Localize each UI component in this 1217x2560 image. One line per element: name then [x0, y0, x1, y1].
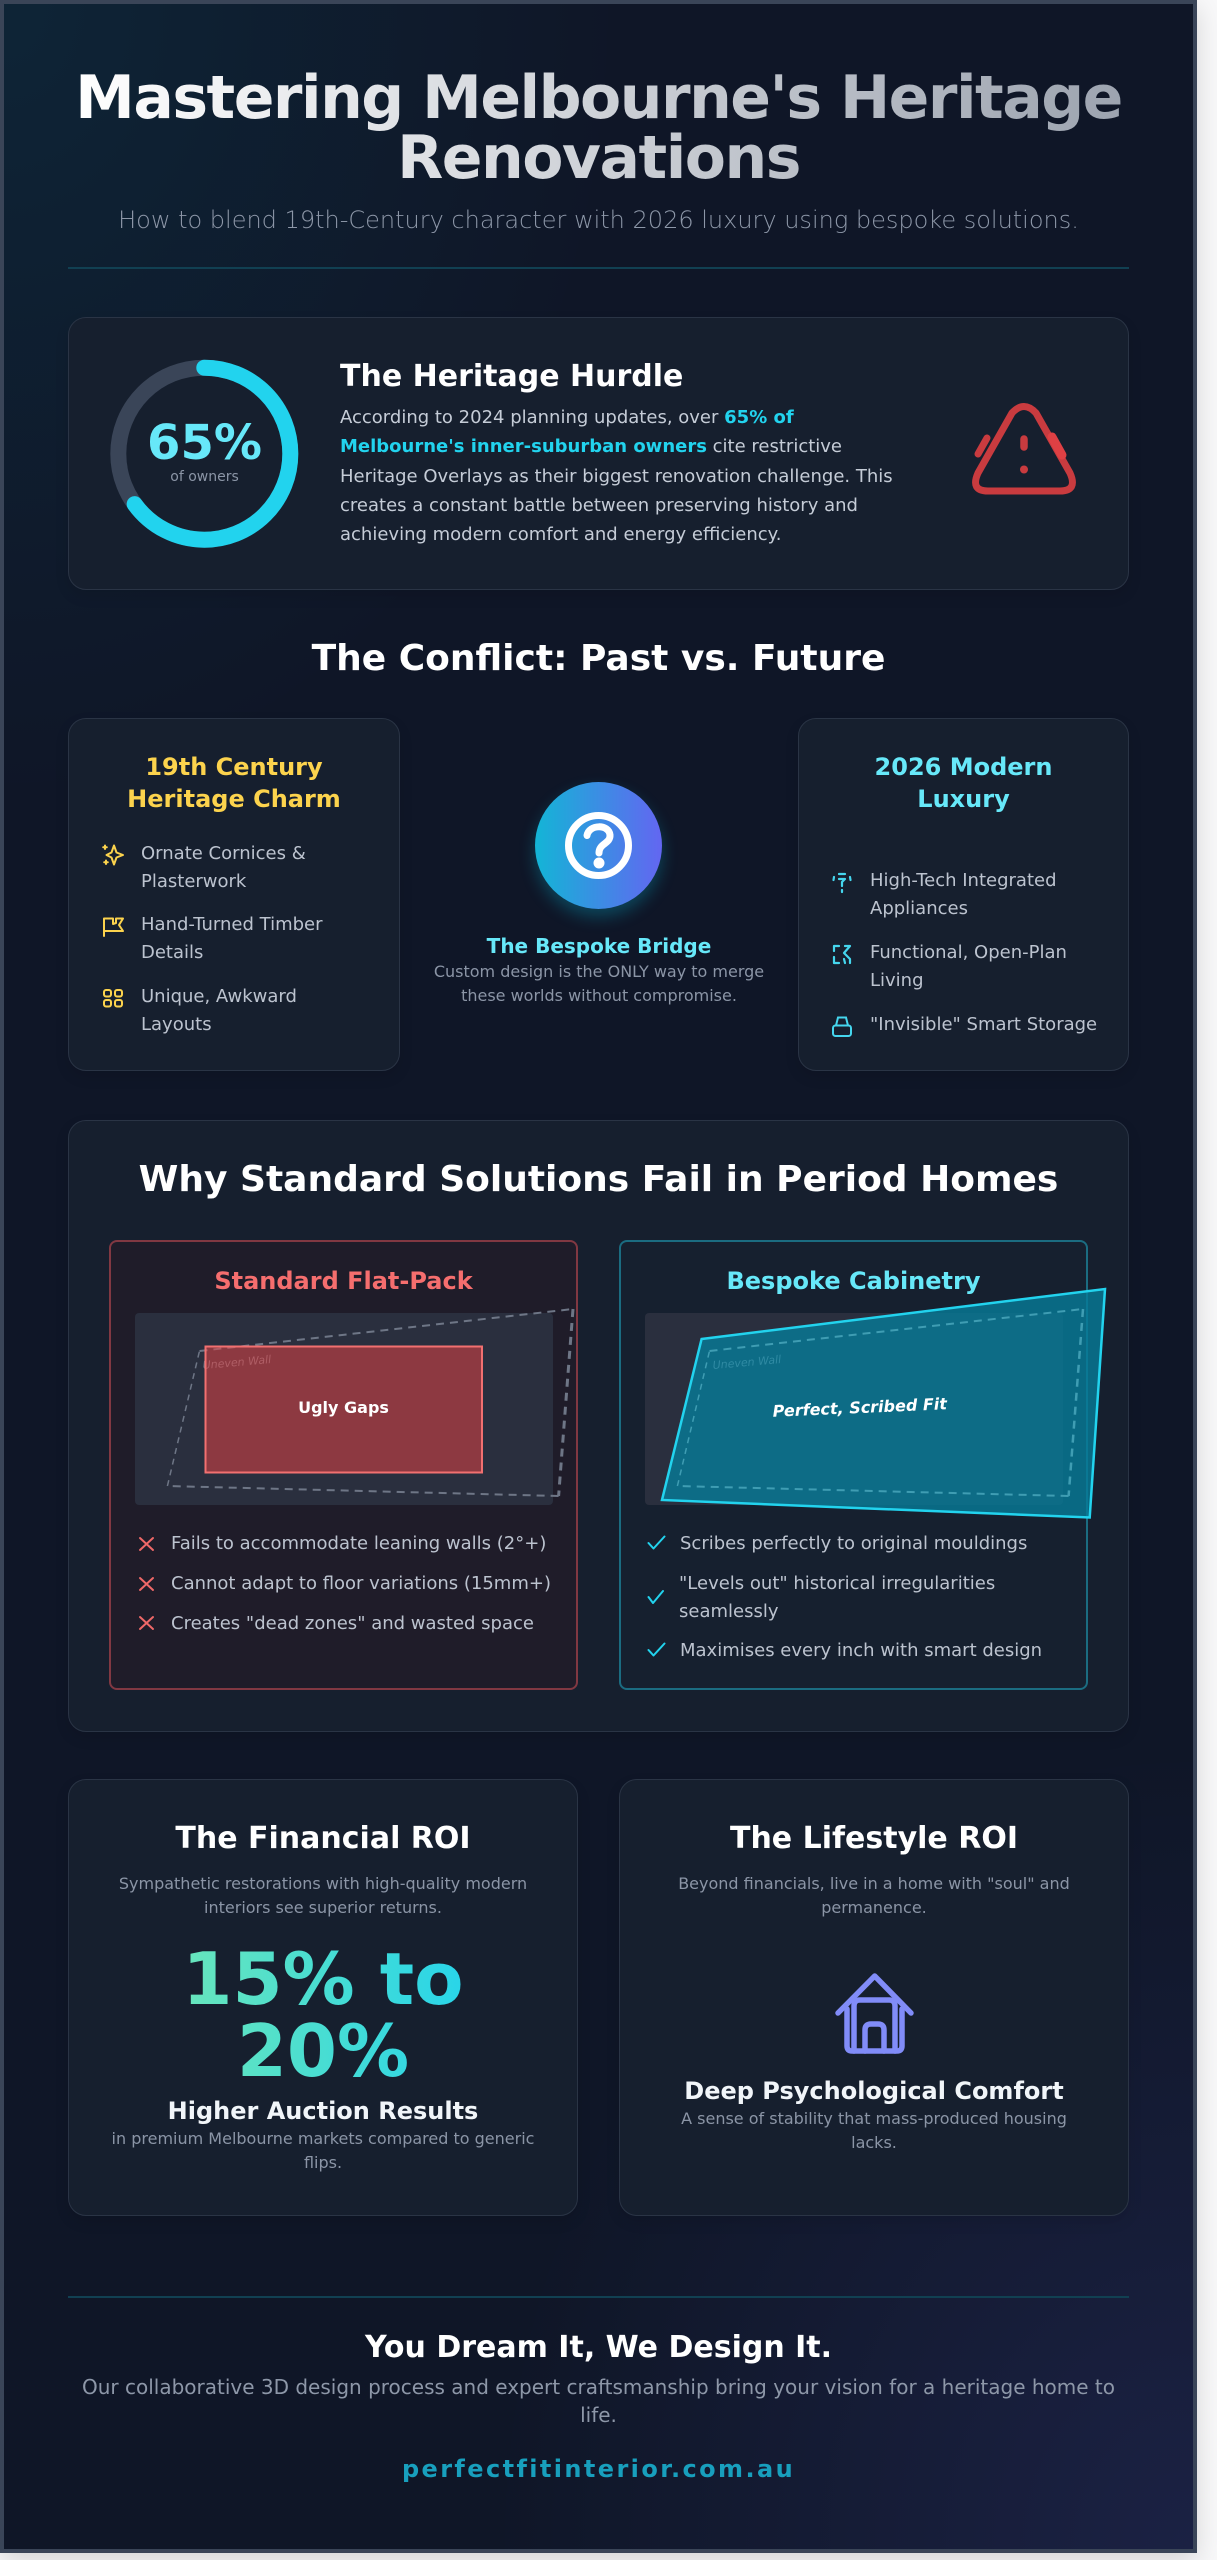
- text: ornate cornices: Ornate Cornices &: [141, 842, 306, 864]
- heading: flat-pack: Standard Flat-Pack: [214, 1267, 473, 1295]
- heading: modern: 2026 Modern: [875, 753, 1052, 781]
- icon: sparkles: [102, 844, 124, 866]
- stat: 15% to 20%: 15% to: [182, 1937, 464, 2021]
- panel: why standard solutions fail: [68, 1120, 1129, 1732]
- text: lifestyle note: [681, 2108, 1067, 2152]
- icon: house: [835, 1973, 914, 2054]
- text: lifestyle description: permanence.: [821, 1898, 927, 1917]
- text: hurdle body: creates a constant battle between preserving history and: [340, 495, 858, 516]
- heading: heritage: 19th Century: [145, 753, 323, 781]
- text: ornate cornices: [141, 842, 306, 892]
- text: open plan: Functional, Open-Plan: [870, 942, 1067, 963]
- text: footer paragraph: [82, 2375, 1115, 2426]
- text: hurdle body: Melbourne's inner-suburban owners cite restrictive: [340, 436, 842, 457]
- icon: appliance: [832, 872, 852, 894]
- text: the bespoke bridge: The Bespoke Bridge: [487, 934, 711, 958]
- heading: the conflict: The Conflict: Past vs. Future: [312, 638, 885, 678]
- text: unique layouts: [141, 986, 297, 1035]
- heading: modern: Luxury: [917, 785, 1010, 813]
- text: the bespoke bridge: [434, 934, 764, 1004]
- text: hurdle body: [340, 407, 893, 545]
- text: financial note: in premium Melbourne markets compared to generic: [112, 2129, 534, 2148]
- list: bespoke benefits: "Levels out" historical irregularities: [679, 1572, 995, 1594]
- heading: financial roi: The Financial ROI: [175, 1821, 471, 1856]
- stat: 15% to 20%: 20%: [237, 2009, 409, 2093]
- icon: storage: [832, 1016, 852, 1037]
- list: bespoke benefits: [648, 1532, 1042, 1661]
- panel: 2026 modern luxury: [798, 718, 1129, 1071]
- text: lifestyle description: [678, 1874, 1070, 1917]
- text: high-tech appliances: Appliances: [870, 898, 968, 919]
- diagram: scribed cabinet against uneven wall: Uneven Wall: [712, 1353, 782, 1372]
- text: unique layouts: Unique, Awkward: [141, 986, 297, 1007]
- text: footer paragraph: life.: [580, 2402, 617, 2426]
- diagram: scribed cabinet against uneven wall: Perfect, Scribed Fit: [772, 1394, 949, 1421]
- list: flat-pack failures: Cannot adapt to floor variations (15mm+): [171, 1572, 551, 1594]
- list: flat-pack failures: Fails to accommodate leaning walls (2°+): [171, 1532, 546, 1554]
- stat: 15% to 20%: [153, 1943, 493, 2087]
- panel: the lifestyle roi: [619, 1779, 1129, 2216]
- donut chart: 65% of owners: [110, 360, 298, 548]
- text: the bespoke bridge: these worlds without compromise.: [461, 986, 737, 1004]
- panel: 19th century heritage charm: [68, 718, 400, 1071]
- text: financial description: interiors see superior returns.: [204, 1898, 442, 1917]
- list: bespoke benefits: seamlessly: [679, 1600, 779, 1622]
- text: financial description: Sympathetic restorations with high-quality modern: [119, 1874, 527, 1893]
- heading: heritage: Heritage Charm: [127, 785, 341, 813]
- heading: bespoke: Bespoke Cabinetry: [726, 1267, 980, 1295]
- text: hurdle body: achieving modern comfort and energy efficiency.: [340, 524, 781, 545]
- text: lifestyle note: lacks.: [851, 2132, 897, 2152]
- heading: heritage: [127, 753, 341, 813]
- text: ornate cornices: Plasterwork: [141, 870, 246, 892]
- text: hand-turned timber: Details: [141, 942, 203, 963]
- text: hurdle body: Heritage Overlays as their biggest renovation challenge. This: [340, 466, 893, 486]
- donut chart: 65% of owners: 65%: [147, 415, 262, 471]
- text: hand-turned timber: Hand-Turned Timber: [141, 914, 323, 935]
- list: flat-pack failures: Creates "dead zones" and wasted space: [171, 1612, 534, 1634]
- heading: you dream it: You Dream It, We Design It.: [365, 2330, 832, 2365]
- icon: open plan: [832, 944, 852, 964]
- diagram: flat-pack against uneven wall: [135, 1308, 574, 1505]
- text: smart storage: "Invisible" Smart Storage: [870, 1014, 1097, 1035]
- text: high-tech appliances: High-Tech Integrated: [870, 870, 1057, 891]
- list: bespoke benefits: Maximises every inch with smart design: [680, 1640, 1042, 1661]
- text: hurdle body: According to 2024 planning updates, over 65% of: [340, 407, 794, 428]
- diagram: scribed cabinet against uneven wall: [645, 1288, 1106, 1519]
- text: hand-turned timber: [141, 914, 323, 963]
- text: financial note: flips.: [304, 2153, 342, 2172]
- heading: why standard solutions fail: Why Standard Solutions Fail in Period Homes: [139, 1159, 1058, 1200]
- panel: bespoke cabinetry: [619, 1240, 1088, 1690]
- heading: lifestyle roi: The Lifestyle ROI: [730, 1821, 1018, 1856]
- list: flat-pack failures: [139, 1532, 551, 1634]
- title: Renovations: [397, 123, 800, 193]
- icon: flag: [103, 918, 124, 937]
- title: Mastering Melbourne's Heritage: [75, 63, 1122, 133]
- text: open plan: Living: [870, 970, 924, 991]
- text: lifestyle description: Beyond financials, live in a home with "soul" and: [678, 1874, 1070, 1893]
- link: website: perfectfitinterior.com.au: [402, 2455, 795, 2483]
- icon: warning triangle: [972, 403, 1076, 494]
- text: footer paragraph: Our collaborative 3D design process and expert craftsmanship bring your vision for a heritage home to: [82, 2375, 1115, 2399]
- diagram: flat-pack against uneven wall: Ugly Gaps: [298, 1398, 389, 1417]
- icon: bespoke bridge question: [535, 782, 662, 909]
- list: bespoke benefits: Scribes perfectly to original mouldings: [680, 1532, 1027, 1554]
- text: high-tech appliances: [870, 870, 1057, 919]
- text: lifestyle note: A sense of stability that mass-produced housing: [681, 2108, 1067, 2128]
- label: higher auction results: Higher Auction Results: [168, 2097, 478, 2125]
- heading: modern: [875, 753, 1052, 813]
- heading: the heritage hurdle: The Heritage Hurdle: [340, 359, 683, 394]
- text: financial description: [119, 1874, 527, 1917]
- title: [68, 68, 1129, 188]
- panel: the financial roi: [68, 1779, 578, 2216]
- panel: standard flat-pack: [109, 1240, 578, 1690]
- text: unique layouts: Layouts: [141, 1014, 212, 1035]
- panel: the heritage hurdle: [68, 317, 1129, 590]
- label: deep psychological comfort: Deep Psychological Comfort: [684, 2076, 1064, 2104]
- icon: grid: [103, 989, 123, 1008]
- diagram: flat-pack against uneven wall: Uneven Wall: [202, 1353, 272, 1372]
- text: the bespoke bridge: Custom design is the ONLY way to merge: [434, 962, 764, 980]
- text: financial note: [112, 2129, 534, 2172]
- text: open plan: [870, 942, 1067, 991]
- donut chart: 65% of owners: of owners: [170, 469, 239, 485]
- subtitle: How to blend 19th-Century character with 2026 luxury using bespoke solutions.: [118, 206, 1079, 234]
